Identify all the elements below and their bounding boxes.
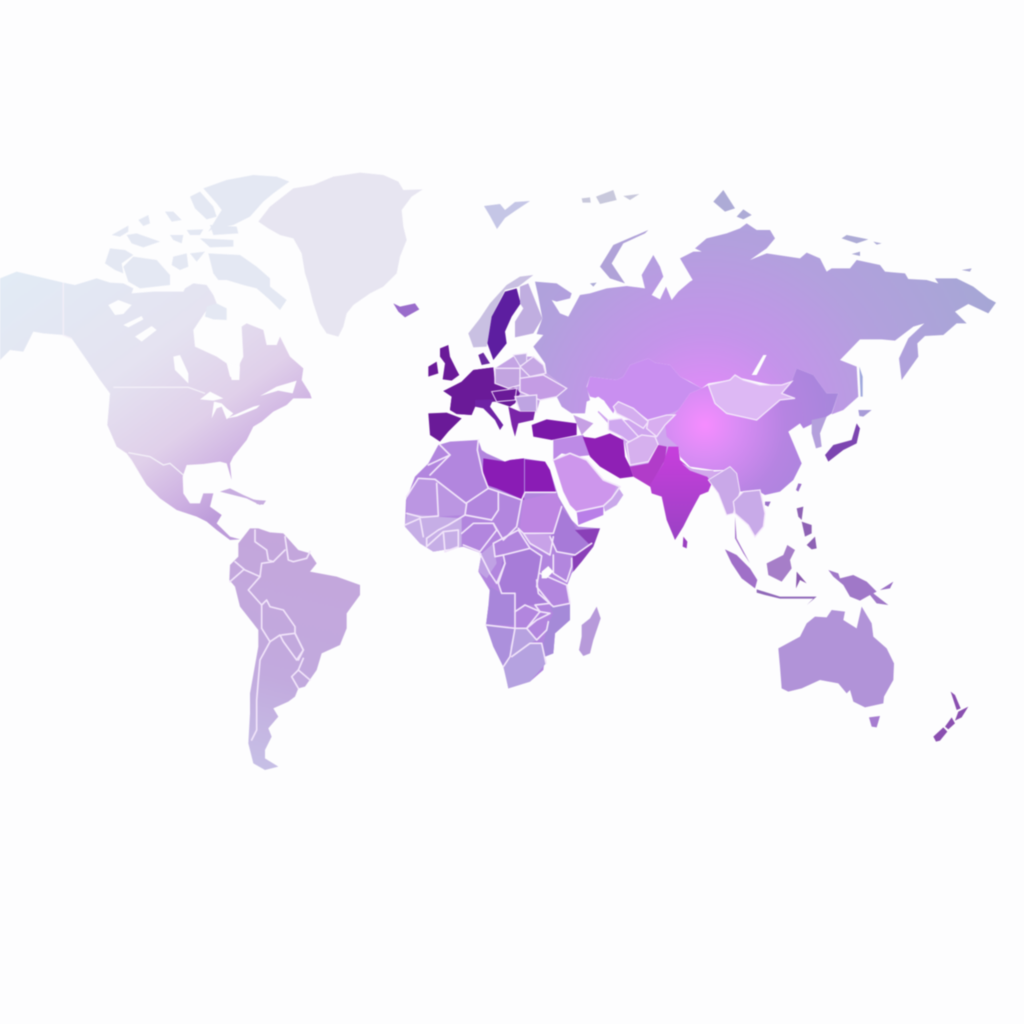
regional tone patches <box>405 478 592 688</box>
Alpine states and Italy <box>475 399 503 430</box>
Lake Baikal <box>752 355 767 375</box>
New Britain <box>880 582 893 590</box>
Myanmar <box>708 467 740 515</box>
Germany and Benelux <box>462 367 495 395</box>
Iceland <box>393 303 419 317</box>
Arabian borders <box>553 453 620 512</box>
Sakhalin <box>859 367 863 397</box>
Mongolia <box>708 375 795 420</box>
Sulawesi <box>796 572 807 588</box>
Libya <box>483 458 524 500</box>
Egypt <box>525 459 556 492</box>
panel: Africa and Arabia <box>405 435 623 688</box>
Spain and Portugal <box>428 413 462 442</box>
Romania <box>515 395 537 412</box>
Korea <box>812 417 827 448</box>
Australia <box>778 607 894 707</box>
continent shape <box>405 440 600 688</box>
Arctic islands <box>105 175 289 320</box>
Caucasus <box>573 415 593 435</box>
Hokkaido <box>858 410 872 417</box>
Western Europe base <box>443 367 520 415</box>
Caribbean islands <box>220 488 266 505</box>
Turkey <box>532 419 577 440</box>
Philippines <box>797 507 817 549</box>
New Guinea <box>828 570 888 605</box>
Sri Lanka <box>683 537 687 548</box>
Balkans <box>508 407 535 437</box>
panel: Eurasia <box>533 190 996 563</box>
Kazakhstan <box>587 358 702 420</box>
Sumatra <box>725 549 757 588</box>
Malay Peninsula <box>735 517 750 563</box>
Madagascar <box>579 607 601 656</box>
Eastern Europe base <box>495 357 567 412</box>
Iraq and Syria <box>553 435 592 460</box>
Russia <box>533 223 996 414</box>
Pakistan <box>630 445 667 495</box>
Iran <box>583 433 633 478</box>
Central Europe <box>492 388 517 402</box>
Somalia <box>573 528 600 572</box>
panel: Europe <box>393 201 593 442</box>
Svalbard <box>484 201 530 229</box>
Taiwan and Hainan <box>765 483 802 507</box>
Poland <box>495 368 520 388</box>
Novaya Zemlya <box>600 230 648 283</box>
Indochina <box>733 490 765 537</box>
India <box>650 447 712 540</box>
Yemen <box>577 506 603 525</box>
Sweden <box>487 288 521 360</box>
Finland <box>515 283 542 337</box>
Franz Josef Land specks <box>582 190 639 204</box>
panel: South America <box>229 528 360 770</box>
Japan <box>825 423 860 462</box>
Java and Lesser Sunda <box>757 589 817 605</box>
lakes and inland water <box>108 300 297 485</box>
Ireland <box>428 362 438 377</box>
Himalayan strip <box>682 463 717 477</box>
country borders <box>63 283 205 475</box>
Central Asia <box>608 402 675 465</box>
Great Britain <box>440 345 459 381</box>
country borders <box>405 440 592 667</box>
New Zealand <box>933 692 968 742</box>
Caspian Sea <box>585 397 607 438</box>
Saudi Arabia <box>553 453 620 512</box>
Greenland <box>258 173 423 337</box>
Oman <box>603 485 623 512</box>
Denmark <box>478 353 490 365</box>
Norway <box>468 275 533 347</box>
Lake Victoria <box>542 566 553 578</box>
Ukraine <box>520 375 567 400</box>
Tasmania <box>869 716 880 727</box>
panel: Maritime Southeast Asia and Oceania <box>725 507 968 742</box>
country borders <box>230 530 310 740</box>
Belarus <box>520 357 546 377</box>
France <box>443 383 477 415</box>
Central Asia base <box>587 400 740 513</box>
China <box>665 368 838 495</box>
Baltic states <box>513 353 527 366</box>
North American mainland <box>0 272 312 540</box>
Arctic Russian islands <box>590 190 972 287</box>
Borneo <box>767 545 795 582</box>
continent shape <box>229 528 360 770</box>
panel: North America and Greenland <box>0 173 423 540</box>
